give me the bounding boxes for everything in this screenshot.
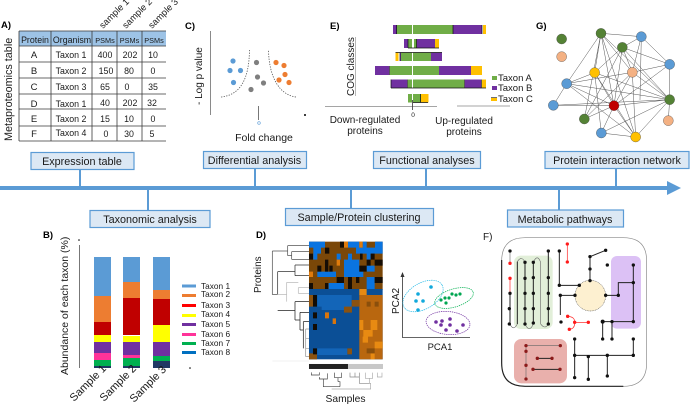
pathway nodes xyxy=(508,249,635,381)
panel D: clustering xyxy=(253,230,476,405)
panel letter C: C) xyxy=(185,21,195,32)
sample column headers xyxy=(97,0,180,30)
dot xyxy=(304,114,306,116)
legend: Taxon B xyxy=(498,83,532,94)
table text: 202 xyxy=(123,98,137,108)
heatmap xyxy=(309,242,383,359)
pathway lines xyxy=(510,250,633,379)
table text: 0 xyxy=(104,129,109,139)
row dendrogram xyxy=(272,246,309,361)
panel A: expression table xyxy=(1,0,180,141)
PCA plot xyxy=(391,272,476,353)
y axis xyxy=(78,245,80,368)
bar: sample 2 xyxy=(123,257,140,368)
table text: Protein xyxy=(21,35,49,45)
table text: 0 xyxy=(151,66,156,76)
pathway lines: red xyxy=(510,244,588,329)
compartment: green xyxy=(514,256,553,329)
table text: D xyxy=(31,99,38,110)
table text: PSMs xyxy=(120,36,140,45)
compartment: red xyxy=(514,339,567,383)
panel B: stacked bar chart xyxy=(43,230,230,405)
table text: F xyxy=(31,129,37,140)
table text: 150 xyxy=(99,66,113,76)
table header xyxy=(19,31,166,46)
panel letter D: D) xyxy=(256,230,266,241)
label: protein interaction network: Protein interaction network xyxy=(553,155,682,167)
y axis label: - Log p value xyxy=(194,47,205,105)
compartment: purple xyxy=(611,256,641,329)
label: metabolic pathways: Metabolic pathways xyxy=(518,214,613,226)
sample labels: Sample 1 xyxy=(68,363,109,404)
label: taxonomic analysis xyxy=(90,210,210,228)
table text: Taxon 2 xyxy=(56,66,87,76)
legend xyxy=(182,281,230,357)
sample labels xyxy=(68,363,169,405)
legend xyxy=(491,73,533,105)
bar: sample 3 xyxy=(153,257,170,368)
panel G: protein interaction network xyxy=(536,21,675,142)
data points xyxy=(227,58,292,92)
y axis label: Abundance of each taxon (%) xyxy=(59,237,71,375)
up-regulated label: Up-regulated xyxy=(435,116,493,127)
label: differential analysis xyxy=(204,152,306,168)
table text: 5 xyxy=(150,129,155,139)
panel F: metabolic pathways xyxy=(483,232,647,386)
table text: A xyxy=(31,50,38,61)
panel letter A: A) xyxy=(1,20,11,31)
PCA axes xyxy=(402,273,470,338)
panel letter F: F) xyxy=(483,232,492,243)
legend: Taxon 4 xyxy=(201,309,230,319)
legend: Taxon C xyxy=(498,94,533,105)
table text: E xyxy=(31,114,37,125)
table text: C xyxy=(31,82,38,93)
y axis label: COG classes xyxy=(346,37,357,96)
zero label: 0 xyxy=(411,112,415,119)
network nodes xyxy=(548,28,675,142)
y axis label: proteins: Proteins xyxy=(253,256,264,293)
table text: B xyxy=(31,66,37,77)
table text: Taxon 4 xyxy=(56,128,87,138)
legend: Taxon 7 xyxy=(201,338,230,348)
bar: sample 1 xyxy=(94,257,111,368)
y axis xyxy=(210,31,212,115)
diverging stacked bars xyxy=(375,25,486,102)
sample labels: Sample 2 xyxy=(98,363,139,404)
table text: 10 xyxy=(148,50,158,60)
label: protein interaction network xyxy=(545,152,689,168)
PCA labels: PCA2 xyxy=(391,287,402,314)
panel E: functional bars xyxy=(325,21,533,138)
zero axis xyxy=(325,105,510,108)
legend: Taxon 1 xyxy=(201,281,230,291)
table text: 0 xyxy=(125,82,130,92)
cell outline xyxy=(502,238,647,386)
legend: Taxon A xyxy=(498,73,532,84)
label: metabolic pathways xyxy=(508,210,624,227)
PCA plot: PCA1 xyxy=(428,342,452,353)
x axis mark xyxy=(258,106,260,120)
label: expression table: Expression table xyxy=(42,156,122,168)
legend: Taxon 5 xyxy=(201,319,230,329)
table text: 10 xyxy=(124,114,134,124)
table text: 30 xyxy=(124,129,134,139)
label: functional analyses: Functional analyses xyxy=(379,155,475,167)
panel E: functional bars: proteins xyxy=(446,127,482,138)
table text xyxy=(21,35,164,140)
cluster ellipses xyxy=(397,274,449,318)
panel C: volcano plot xyxy=(185,21,306,144)
table text: 40 xyxy=(100,98,110,108)
x axis label: samples: Samples xyxy=(325,394,366,405)
pathway nodes: red xyxy=(508,242,590,331)
zero mark xyxy=(258,122,260,124)
table text: 80 xyxy=(124,66,134,76)
table text: 400 xyxy=(98,50,112,60)
x axis label: Fold change xyxy=(235,132,293,144)
timeline arrow xyxy=(0,168,681,210)
label: taxonomic analysis: Taxonomic analysis xyxy=(103,214,197,226)
table text: Organism xyxy=(53,35,91,45)
table text: 15 xyxy=(100,114,110,124)
panel letter E: E) xyxy=(330,21,340,32)
label: expression table xyxy=(31,152,134,170)
panel letter G: G) xyxy=(536,21,547,32)
cluster points xyxy=(414,285,433,312)
table text: Taxon 2 xyxy=(56,114,87,124)
legend: Taxon 3 xyxy=(201,300,230,310)
table text: Taxon 1 xyxy=(56,99,87,109)
panel E: functional bars: proteins xyxy=(347,126,383,137)
table text: PSMs xyxy=(95,36,115,45)
axis label: metaproteomics table: Metaproteomics table xyxy=(3,38,15,141)
panel letter B: B) xyxy=(43,230,53,241)
table text: 0 xyxy=(151,114,156,124)
label: differential analysis: Differential analysis xyxy=(208,155,302,167)
table text: 65 xyxy=(100,82,110,92)
table grid xyxy=(19,31,166,141)
sample labels: Sample 3 xyxy=(128,364,169,405)
network edges xyxy=(553,33,670,137)
table text: 32 xyxy=(147,98,157,108)
label: sample/protein clustering: Sample/Protein clustering xyxy=(297,212,421,224)
legend: Taxon 2 xyxy=(201,289,230,299)
column dendrogram xyxy=(311,372,382,389)
label: sample/protein clustering xyxy=(286,208,434,226)
table text: 35 xyxy=(148,82,158,92)
compartment: yellow circle xyxy=(575,280,606,311)
significance curves xyxy=(221,50,296,97)
pathway nodes: red compartment xyxy=(524,344,562,381)
sample bar xyxy=(309,364,383,369)
table text: 202 xyxy=(123,50,137,60)
table text: Taxon 1 xyxy=(56,50,87,60)
down-regulated label: Down-regulated xyxy=(330,115,400,126)
label: functional analyses xyxy=(374,152,480,168)
table text: Taxon 3 xyxy=(56,82,87,92)
legend: Taxon 8 xyxy=(201,347,230,357)
table text: PSMs xyxy=(144,36,164,45)
legend: Taxon 6 xyxy=(201,329,230,339)
y axis rule xyxy=(354,37,356,96)
